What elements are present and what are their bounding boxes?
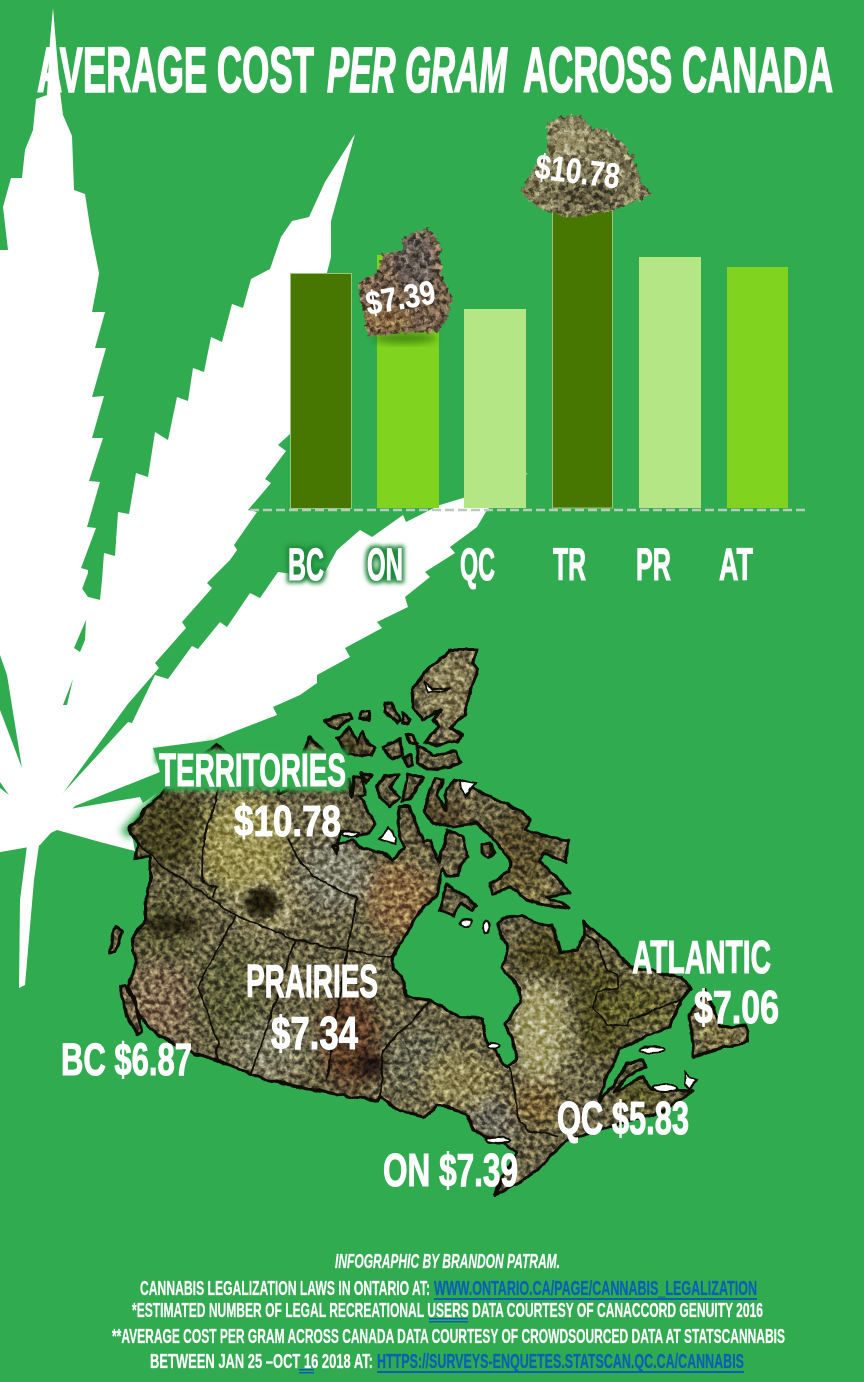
green glow behind map edge bbox=[125, 745, 216, 835]
label: TR: TR bbox=[553, 539, 586, 590]
bar: QC bbox=[464, 309, 526, 508]
map texture bbox=[100, 640, 760, 1210]
bar: TR bbox=[552, 210, 612, 508]
title: AVERAGE COST bbox=[37, 34, 314, 106]
map label: Prairies: PRAIRIES bbox=[246, 955, 378, 1007]
map label: Territories bbox=[159, 744, 346, 846]
map outline bbox=[110, 650, 748, 1195]
dark centre of bud bbox=[243, 887, 281, 919]
map label: BC: BC $6.87 bbox=[61, 1034, 192, 1085]
title bbox=[37, 34, 833, 106]
bar: BC bbox=[290, 274, 352, 508]
map label: Atlantic bbox=[632, 931, 779, 1033]
footer credits bbox=[112, 1251, 785, 1374]
provincial borders bbox=[138, 788, 683, 1137]
bar chart bbox=[250, 210, 808, 510]
bar: ON bbox=[377, 255, 439, 508]
bud price: $10.78 bbox=[533, 147, 622, 196]
source line: dates: BETWEEN JAN 25 –OCT 16 2018 AT: bbox=[150, 1351, 373, 1373]
label: QC: QC bbox=[460, 539, 495, 590]
map label: Atlantic: ATLANTIC bbox=[632, 931, 771, 983]
label: ON: ON bbox=[367, 539, 403, 590]
bud price: $7.39 bbox=[363, 273, 438, 322]
byline: INFOGRAPHIC BY BRANDON PATRAM. bbox=[335, 1251, 560, 1273]
white lakes and islands bbox=[342, 680, 698, 1143]
map label: Territories: $10.78 bbox=[234, 797, 341, 846]
map label: ON: ON $7.39 bbox=[383, 1144, 518, 1196]
bar: PR bbox=[639, 257, 701, 508]
source line: dates bbox=[150, 1351, 744, 1374]
icon: cannabis leaf bbox=[0, 8, 528, 988]
map label: Atlantic: $7.06 bbox=[694, 981, 779, 1033]
bud on TR bar bbox=[520, 114, 652, 218]
label: AT: AT bbox=[719, 539, 753, 590]
map label: Territories: TERRITORIES bbox=[159, 744, 346, 796]
map of Canada bbox=[100, 640, 760, 1210]
bar: AT bbox=[727, 267, 788, 508]
map label: QC: QC $5.83 bbox=[557, 1092, 689, 1144]
map label: Prairies bbox=[246, 955, 378, 1059]
title: PER GRAM bbox=[327, 34, 508, 106]
label: BC: BC bbox=[288, 539, 324, 590]
source line: legalization: CANNABIS LEGALIZATION LAWS IN ONTARIO AT: bbox=[140, 1278, 430, 1300]
map label: Prairies: $7.34 bbox=[271, 1007, 358, 1059]
axis labels bbox=[288, 539, 753, 590]
bud on ON bar bbox=[358, 227, 453, 347]
label: PR: PR bbox=[636, 539, 671, 590]
